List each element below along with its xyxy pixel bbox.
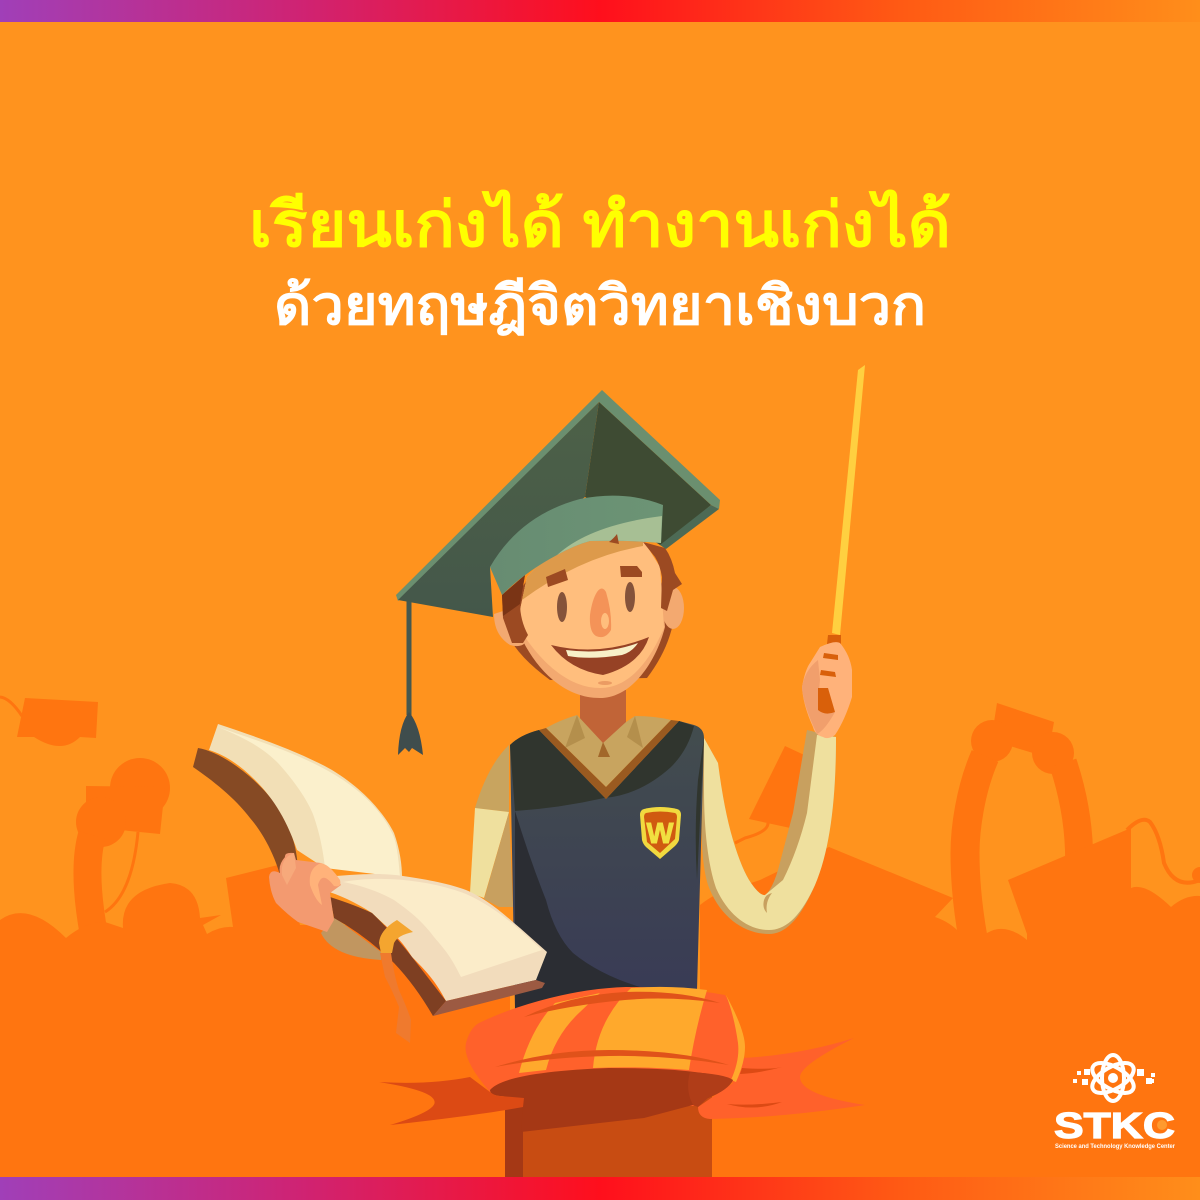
book: right page highlight — [343, 879, 542, 977]
silhouette: right cap triangle — [735, 746, 815, 843]
eyebrows — [546, 566, 642, 587]
cap right panel — [585, 402, 711, 545]
tassel — [398, 600, 423, 755]
book: under shadow — [321, 917, 381, 960]
head — [396, 390, 720, 755]
left ear — [494, 608, 525, 646]
title: yellow line: เรียนเก่งได้ ทำงานเก่งได้ — [249, 189, 951, 260]
logo atom icon — [1088, 1055, 1138, 1101]
logo dot — [1157, 1120, 1167, 1130]
hair tuft — [609, 534, 619, 544]
vest badge: W — [646, 818, 674, 850]
pointer stick — [827, 365, 865, 644]
book: right page — [323, 874, 547, 1001]
cap rim — [396, 390, 720, 601]
chin mark — [598, 681, 612, 685]
forehead shadow — [522, 538, 643, 600]
shirt collar and V-neck — [539, 715, 679, 799]
graduate character — [193, 365, 865, 1177]
silhouette: right crowd and caps — [700, 828, 1200, 1180]
right arm — [702, 730, 836, 934]
sash wrap — [466, 987, 745, 1132]
nose — [590, 588, 611, 637]
silhouette: left graduate arm and cap — [76, 758, 170, 935]
cap right underside — [660, 505, 719, 549]
right hand — [802, 642, 852, 738]
bookmark ribbon — [379, 920, 413, 1043]
eyes — [557, 582, 635, 622]
book: left page highlight — [218, 727, 400, 877]
left arm — [470, 745, 513, 907]
hair back — [503, 560, 675, 680]
vest — [510, 721, 704, 1010]
legs — [505, 1090, 712, 1177]
vest badge — [640, 807, 681, 859]
book: left page — [209, 724, 402, 877]
title: white line: ด้วยทฤษฎีจิตวิทยาเชิงบวก — [274, 276, 926, 336]
book: left cover — [193, 748, 298, 890]
top gradient bar — [0, 0, 1200, 22]
cap band — [490, 496, 663, 595]
right ear — [662, 587, 684, 629]
logo side squares — [1073, 1069, 1155, 1085]
left hand — [269, 853, 341, 932]
book: bottom edge — [433, 980, 545, 1016]
neck — [580, 690, 626, 745]
sash left tail — [379, 1077, 524, 1125]
right hair — [643, 542, 682, 611]
silhouette: right tassel cord — [1127, 820, 1200, 883]
STKC logo — [1054, 1055, 1176, 1150]
logo tagline: Science and Technology Knowledge Center — [1055, 1144, 1176, 1150]
crowd silhouette — [0, 697, 1200, 1180]
silhouette: right graduate arch arms — [965, 703, 1080, 938]
face — [520, 540, 665, 698]
bottom gradient bar — [0, 1177, 1200, 1200]
logo wordmark: STKC — [1054, 1105, 1175, 1146]
mouth — [551, 637, 649, 675]
silhouette: left crowd heads — [0, 864, 510, 1180]
book — [193, 724, 547, 1043]
cap — [396, 390, 720, 617]
cap band highlight — [557, 516, 662, 555]
left hair — [502, 575, 528, 643]
book: right cover — [330, 897, 446, 1016]
cap left panel — [398, 402, 599, 617]
silhouette: flying cap — [0, 697, 98, 746]
sash right tail — [698, 1038, 865, 1119]
